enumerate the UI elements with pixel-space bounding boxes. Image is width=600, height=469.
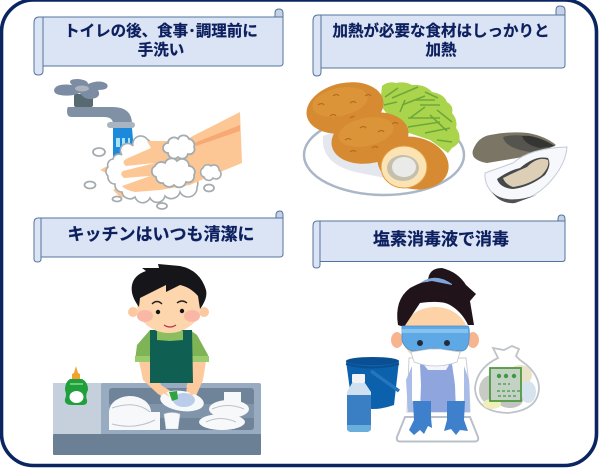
croquette cut bbox=[372, 130, 454, 196]
water bbox=[113, 128, 134, 157]
faucet bbox=[54, 79, 135, 128]
banner: hand washing bbox=[34, 9, 283, 75]
torso bbox=[135, 330, 209, 383]
cup bbox=[164, 412, 180, 429]
bag label bbox=[490, 368, 521, 401]
open oyster bbox=[485, 147, 567, 203]
shredded cabbage bbox=[380, 82, 460, 153]
croquette back bbox=[302, 75, 388, 141]
gloves bbox=[409, 401, 468, 435]
illustration: croquettes on plate bbox=[302, 75, 464, 196]
face details bbox=[156, 310, 160, 314]
stacked plates left bbox=[109, 396, 160, 430]
plate bbox=[304, 115, 464, 195]
head bbox=[391, 268, 479, 366]
disinfectant bottle bbox=[347, 374, 371, 432]
illustration: man washing dishes bbox=[53, 264, 261, 455]
bucket bbox=[346, 357, 399, 409]
arms bbox=[139, 361, 206, 400]
banner: chlorine disinfectant bbox=[313, 215, 565, 268]
foam bubble: right bbox=[201, 165, 221, 180]
foam bubble: centre bbox=[152, 158, 195, 187]
hair bbox=[132, 264, 206, 309]
garbage bag bbox=[475, 346, 539, 413]
closed oyster bbox=[473, 132, 556, 163]
illustration: oysters bbox=[473, 132, 567, 203]
banner text: トイレの後、食事･調理前に bbox=[64, 21, 258, 40]
dish soap bottle bbox=[65, 366, 88, 405]
banner text: キッチンはいつも清潔に bbox=[68, 225, 254, 244]
banner: kitchen bbox=[34, 211, 283, 262]
illustration: woman with chlorine disinfectant bbox=[346, 268, 539, 442]
arm and hands bbox=[121, 112, 242, 192]
sink counter bbox=[53, 383, 261, 455]
ponytail and hair bbox=[397, 268, 476, 327]
finger tips behind foam bbox=[100, 160, 135, 198]
plate being washed bbox=[159, 385, 205, 414]
floor mat bbox=[397, 417, 478, 442]
goggles bbox=[402, 326, 469, 351]
mask bbox=[411, 349, 460, 366]
banner: hand washing: 手洗い bbox=[138, 40, 184, 59]
illustration: washing hands under faucet bbox=[54, 79, 242, 209]
banner text: 塩素消毒液で消毒 bbox=[373, 230, 509, 249]
body with coat and apron bbox=[406, 358, 470, 412]
head bbox=[128, 264, 209, 333]
banner: heating food: 加熱 bbox=[425, 41, 457, 59]
croquette middle bbox=[327, 105, 413, 171]
foam bubble: back of hand bbox=[163, 135, 195, 159]
stacked plates right bbox=[199, 392, 249, 430]
loose bubbles bbox=[84, 148, 214, 209]
soap foam around hands bbox=[106, 136, 198, 203]
banner: heating food bbox=[313, 6, 565, 76]
banner text: 加熱が必要な食材はしっかりと bbox=[332, 21, 550, 40]
